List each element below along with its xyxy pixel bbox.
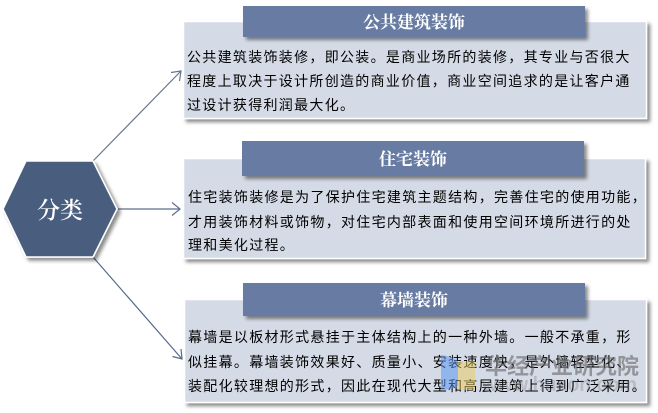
panel header xyxy=(243,283,585,316)
panel text xyxy=(188,329,647,394)
panel header: 住宅装饰 xyxy=(379,149,447,169)
panel text: 住宅装饰装修是为了保护住宅建筑主题结构，完善住宅的使用功能， xyxy=(188,189,647,205)
panel text: 理和美化过程。 xyxy=(188,237,295,253)
watermark xyxy=(441,354,639,396)
watermark: 华经产业研究院 xyxy=(485,354,639,379)
panel text: 装配化较理想的形式，因此在现代大型和高层建筑上得到广泛采用。 xyxy=(188,378,647,394)
panel: residential decoration xyxy=(184,141,647,258)
hexagon: classification xyxy=(3,161,117,257)
panel text: 似挂幕。幕墙装饰效果好、质量小、安装速度快，是外墙轻型化、 xyxy=(188,354,632,370)
panel text: 程度上取决于设计所创造的商业价值，商业空间追求的是让客户通 xyxy=(187,73,631,89)
panel text: 过设计获得利润最大化。 xyxy=(187,97,355,113)
panel text: 幕墙是以板材形式悬挂于主体结构上的一种外墙。一般不承重，形 xyxy=(188,329,632,345)
panel header xyxy=(243,6,585,37)
arrow: to curtain wall decoration xyxy=(93,257,182,359)
panel: public building decoration xyxy=(184,6,646,118)
watermark: www.huaon.com xyxy=(481,374,637,396)
panel text xyxy=(187,49,631,113)
panel header: 公共建筑装饰 xyxy=(363,12,465,32)
arrow: to residential decoration xyxy=(118,202,180,216)
panel text xyxy=(188,189,647,253)
panel header: 幕墙装饰 xyxy=(380,290,448,310)
panel: curtain wall decoration xyxy=(184,283,647,402)
panel header xyxy=(242,141,584,176)
arrow: to public building decoration xyxy=(93,71,181,161)
panel text: 才用装饰材料或饰物，对住宅内部表面和使用空间环境所进行的处 xyxy=(188,214,632,230)
hexagon label: 分类 xyxy=(37,198,83,223)
panel text: 公共建筑装饰装修，即公装。是商业场所的装修，其专业与否很大 xyxy=(187,49,631,65)
